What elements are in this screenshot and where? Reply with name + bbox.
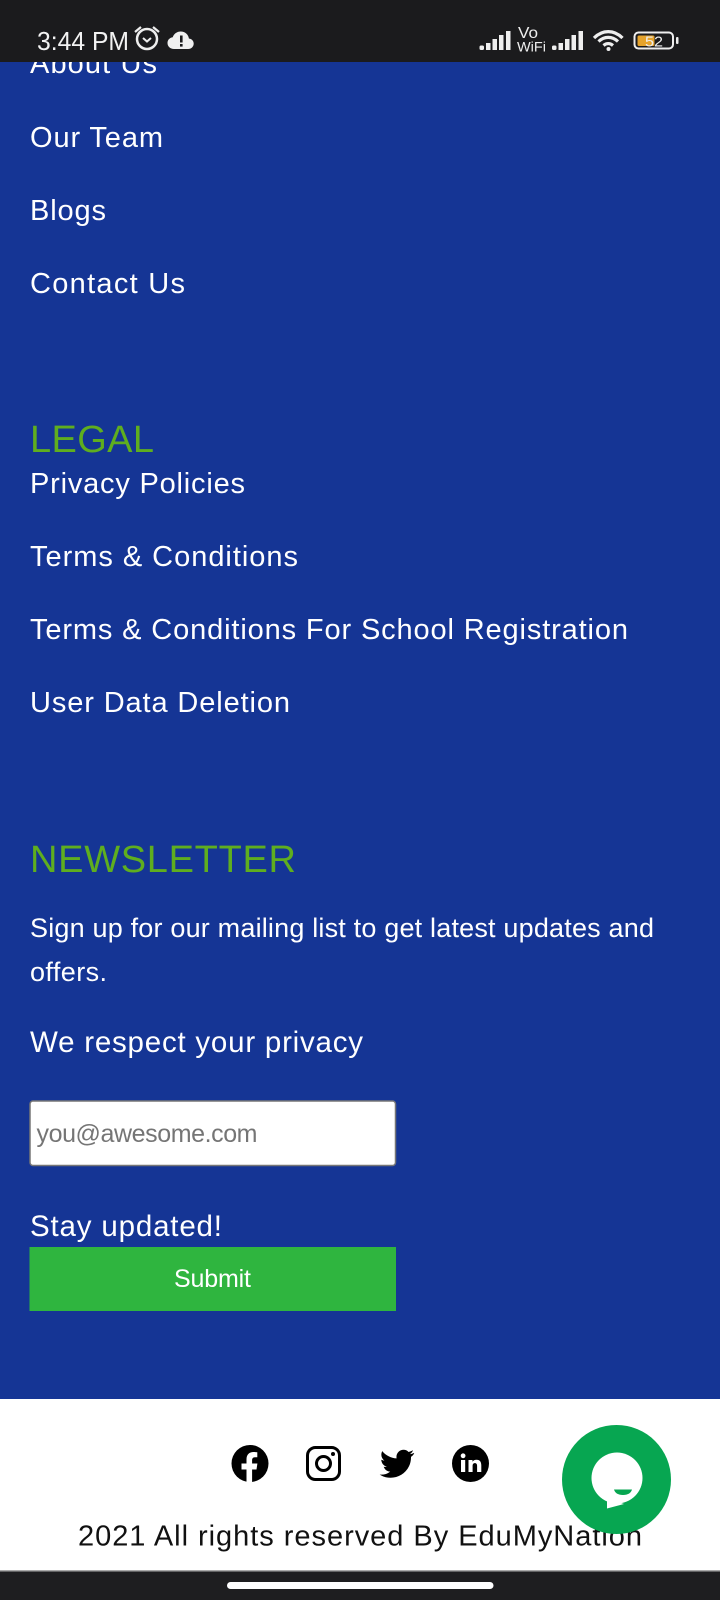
icon: vo wifi: Vo bbox=[518, 25, 538, 42]
panel: company links: Our Team bbox=[30, 122, 163, 154]
icon: linkedin bbox=[452, 1445, 489, 1482]
icon: signal two bbox=[552, 31, 583, 50]
panel: navigation bar bbox=[0, 1570, 720, 1600]
panel: company links: Contact Us bbox=[30, 268, 185, 300]
heading: newsletter: NEWSLETTER bbox=[30, 839, 296, 881]
panel: company links: Blogs bbox=[30, 195, 106, 227]
text block: privacy note: We respect your privacy bbox=[30, 1026, 363, 1059]
email input field bbox=[30, 1101, 396, 1166]
text block: newsletter description bbox=[30, 913, 654, 987]
icon: twitter bbox=[380, 1450, 414, 1478]
home indicator bbox=[227, 1582, 494, 1589]
icon: signal one bbox=[480, 31, 510, 50]
icon: facebook bbox=[232, 1445, 268, 1482]
icon: alarm bbox=[135, 27, 159, 49]
submit button bbox=[30, 1247, 396, 1311]
panel: legal links: Terms & Conditions bbox=[30, 541, 298, 573]
panel: company links bbox=[30, 48, 185, 300]
panel: white bottom footer bbox=[0, 1399, 720, 1571]
icon: battery 52: 52 bbox=[645, 34, 663, 50]
heading: legal: LEGAL bbox=[30, 419, 154, 461]
icon: instagram bbox=[308, 1448, 340, 1480]
panel: company links: About Us bbox=[30, 48, 157, 80]
text block: copyright: 2021 All rights reserved By EduMyNation bbox=[78, 1520, 642, 1552]
panel: legal links bbox=[30, 468, 628, 719]
panel: legal links: Privacy Policies bbox=[30, 468, 245, 500]
icon: vo wifi: WiFi bbox=[517, 38, 546, 54]
panel: legal links: Terms & Conditions For School Registration bbox=[30, 614, 628, 646]
panel: status bar bbox=[0, 0, 720, 62]
text block: stay updated: Stay updated! bbox=[30, 1210, 222, 1243]
text block: newsletter description: Sign up for our mailing list to get latest updates and bbox=[30, 913, 654, 943]
icon: vo wifi bbox=[517, 25, 546, 54]
panel: legal links: User Data Deletion bbox=[30, 687, 290, 719]
icon: chat button bbox=[562, 1425, 671, 1534]
status time: 3:44 PM bbox=[37, 26, 129, 56]
email input field: you@awesome.com bbox=[36, 1120, 258, 1148]
icon: battery 52 bbox=[634, 32, 678, 50]
icon: wifi bbox=[594, 32, 622, 51]
submit button: Submit bbox=[174, 1265, 251, 1293]
text block: newsletter description: offers. bbox=[30, 957, 107, 987]
icon: cloud alert bbox=[168, 32, 194, 49]
